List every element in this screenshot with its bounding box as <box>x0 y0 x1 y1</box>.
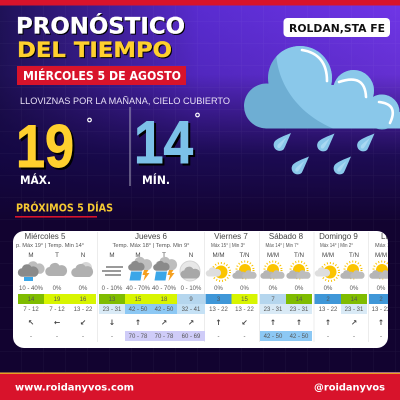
day: domingo 9: ↗ <box>351 318 357 327</box>
day: miércoles 5: M <box>28 252 34 259</box>
day: domingo 9 <box>314 232 367 340</box>
day: viernes 7: 13 - 22 <box>235 307 254 313</box>
day: domingo 9: 0% <box>350 286 359 292</box>
day: viernes 7: - <box>244 334 246 340</box>
day: sábado 8: M/M <box>267 252 279 259</box>
footer <box>0 372 400 400</box>
day: sábado 8: 7 <box>271 297 275 303</box>
icon: sun over clouds <box>286 262 311 279</box>
location badge <box>284 18 390 37</box>
day: miércoles 5: ← <box>54 318 60 327</box>
icon: night partly cloudy <box>180 261 200 281</box>
day: miércoles 5: 7 - 12 <box>23 307 39 313</box>
day: jueves 6: T <box>162 252 166 259</box>
day: domingo 9: 14 <box>351 297 358 303</box>
day: miércoles 5: 19 <box>54 297 61 303</box>
day: jueves 6: 18 <box>161 297 168 303</box>
day: sábado 8: 23 - 31 <box>290 307 309 313</box>
date banner <box>17 66 186 85</box>
icon: cloudy <box>45 263 67 276</box>
day: miércoles 5: 0% <box>79 286 88 292</box>
forecast table <box>13 231 400 348</box>
icon: sun over clouds <box>260 262 285 279</box>
day: sábado 8: Máx 14° | Min 7° <box>266 243 298 249</box>
day: jueves 6: 70 - 78 <box>155 334 174 340</box>
day: miércoles 5: 10 - 40% <box>19 286 44 292</box>
day: jueves 6: ↗ <box>161 318 167 327</box>
day: lunes (cut off): 0% <box>377 286 386 292</box>
day: lunes (cut off): M/M <box>375 252 387 259</box>
day: jueves 6: ↑ <box>135 318 141 327</box>
day: lunes (cut off): - <box>380 334 382 340</box>
day: jueves 6: ↗ <box>188 318 194 327</box>
icon: rain cloud <box>240 40 400 174</box>
day: jueves 6: M <box>109 252 115 259</box>
day: sábado 8: ↑ <box>270 318 276 327</box>
day: jueves 6: 15 <box>135 297 142 303</box>
day: jueves 6: 42 - 50 <box>129 307 148 313</box>
day: miércoles 5: ↙ <box>80 318 86 327</box>
day: jueves 6: M <box>135 252 141 259</box>
day: miércoles 5: - <box>82 334 84 340</box>
day: domingo 9: M/M <box>322 252 334 259</box>
day: jueves 6: 40 - 70% <box>126 286 151 292</box>
icon: sun over clouds <box>369 260 388 280</box>
icon: night cloudy <box>71 262 93 277</box>
day: miércoles 5: 7 - 12 <box>49 307 65 313</box>
icon: sun over clouds <box>340 262 365 279</box>
day: jueves 6: Temp. Máx 18° | Temp. Min 9° <box>112 243 190 249</box>
day: miércoles 5: 0% <box>53 286 62 292</box>
day: miércoles 5: p. Máx 19° | Temp. Min 14° <box>16 243 84 249</box>
day: miércoles 5: - <box>30 334 32 340</box>
day: viernes 7: Viernes 7 <box>214 232 248 241</box>
title: pronóstico: PRONÓSTICO <box>16 14 185 40</box>
day: jueves 6: 70 - 78 <box>129 334 148 340</box>
day: lunes (cut off) <box>369 233 388 337</box>
day: domingo 9: ↑ <box>325 318 331 327</box>
location badge: ROLDAN,STA FE <box>289 22 385 35</box>
day: lunes (cut off): 13 - 22 <box>372 307 391 313</box>
day: miércoles 5: T <box>55 252 59 259</box>
title: del tiempo: DEL TIEMPO <box>17 38 172 63</box>
icon: rain cloud small <box>18 261 45 281</box>
day: domingo 9: 13 - 22 <box>319 307 338 313</box>
day: viernes 7: 3 <box>217 297 221 303</box>
day: jueves 6: 32 - 41 <box>182 307 201 313</box>
day: sábado 8: T/N <box>294 252 304 259</box>
day: domingo 9: 23 - 31 <box>345 307 364 313</box>
day: sábado 8: 0% <box>295 286 304 292</box>
forecast summary: LLOVIZNAS POR LA MAÑANA, CIELO CUBIERTO <box>20 96 230 107</box>
icon: sun and cloud <box>315 263 339 281</box>
icon: fog <box>102 266 123 276</box>
day: miércoles 5: 16 <box>80 297 87 303</box>
min temperature: 14 <box>134 109 194 176</box>
day: domingo 9: Máx 14° | Min 2° <box>320 243 353 249</box>
day: domingo 9: 0% <box>324 286 333 292</box>
day: sábado 8: Sábado 8 <box>269 232 304 241</box>
max temperature: 19 <box>16 113 74 180</box>
day: jueves 6: ↓ <box>109 318 115 327</box>
day: lunes (cut off): ↑ <box>378 318 384 327</box>
website: www.roidanyvos.com <box>15 382 134 394</box>
day: viernes 7: 0% <box>214 286 224 292</box>
day: sábado 8: ↑ <box>296 318 302 327</box>
day: domingo 9: - <box>327 334 329 340</box>
day: lunes (cut off): 2 <box>379 297 383 303</box>
day: miércoles 5: ↖ <box>28 318 34 327</box>
day: viernes 7 <box>206 232 258 340</box>
day: domingo 9: Domingo 9 <box>319 232 358 241</box>
day: sábado 8: 14 <box>296 297 303 303</box>
day: domingo 9: 2 <box>326 297 330 303</box>
top red bar <box>0 0 400 6</box>
day: viernes 7: 15 <box>241 297 248 303</box>
date banner: MIÉRCOLES 5 DE AGOSTO <box>23 68 181 83</box>
day: jueves 6: - <box>111 334 113 340</box>
min temperature: MÍN. <box>142 172 170 187</box>
day: miércoles 5: - <box>56 334 58 340</box>
day: viernes 7: - <box>218 334 220 340</box>
day: viernes 7: ↑ <box>215 318 222 327</box>
day: sábado 8: 0% <box>269 286 278 292</box>
max temperature: MÁX. <box>20 172 51 187</box>
social handle: @roidanyvos <box>314 382 385 394</box>
day: miércoles 5: N <box>81 252 85 259</box>
day: jueves 6: 42 - 50 <box>155 307 174 313</box>
day: miércoles 5: Miércoles 5 <box>25 232 66 241</box>
icon: storm <box>128 257 152 281</box>
day: sábado 8: 42 - 50 <box>264 334 283 340</box>
day: jueves 6: 0 - 10% <box>181 286 202 292</box>
next days heading: PRÓXIMOS 5 DÍAS <box>16 202 113 214</box>
day: jueves 6: 0 - 10% <box>102 286 123 292</box>
day: jueves 6: 40 - 70% <box>152 286 177 292</box>
day: sábado 8 <box>260 232 312 341</box>
day: jueves 6: N <box>189 252 193 259</box>
day: domingo 9: - <box>353 334 355 340</box>
day: viernes 7: 0% <box>240 286 250 292</box>
day: sábado 8: 23 - 31 <box>264 307 283 313</box>
day: jueves 6: Jueves 6 <box>135 232 168 241</box>
icon: storm <box>153 257 177 281</box>
day: sábado 8: 42 - 50 <box>290 334 309 340</box>
day: miércoles 5 <box>16 232 96 340</box>
day: domingo 9: T/N <box>349 252 359 259</box>
day: jueves 6: 9 <box>189 297 193 303</box>
day: jueves 6: 23 - 31 <box>103 307 122 313</box>
icon: sun over clouds <box>232 262 257 279</box>
day: viernes 7: Máx 15° | Min 3° <box>211 243 245 249</box>
day: miércoles 5: 14 <box>28 297 35 303</box>
day: jueves 6 <box>99 232 205 341</box>
day: viernes 7: ↙ <box>241 318 248 327</box>
day: miércoles 5: 13 - 22 <box>74 307 93 313</box>
day: jueves 6: 60 - 69 <box>182 334 201 340</box>
day: viernes 7: M/M <box>212 252 225 259</box>
icon: sun and cloud <box>206 263 230 281</box>
day: viernes 7: 13 - 22 <box>209 307 228 313</box>
day: jueves 6: 13 <box>109 297 116 303</box>
day: viernes 7: T/N <box>240 252 249 259</box>
